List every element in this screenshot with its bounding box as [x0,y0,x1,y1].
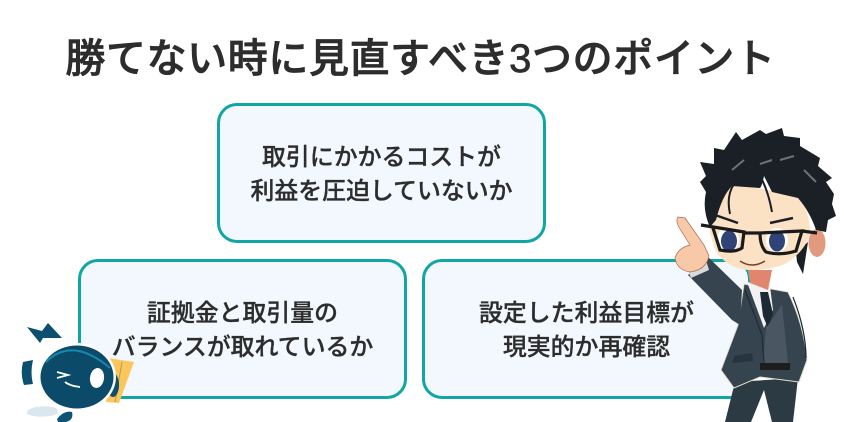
illustration: businessman pointing up [674,128,836,422]
title: 勝てない時に見直すべき3つのポイント [65,37,776,81]
shirt and tie [747,282,773,328]
jacket body [721,284,807,388]
panel: profit target: 設定した利益目標が [479,300,694,326]
panel: margin and volume: バランスが取れているか [112,334,373,360]
vest [763,304,788,363]
glasses [701,225,817,254]
legs [725,378,798,422]
face [708,183,810,270]
panel: profit target [422,259,751,399]
shirt cuff [687,260,709,278]
raised arm [688,257,742,325]
pointing hand [675,217,709,272]
hair [700,128,836,232]
belt [760,363,790,370]
mouth [740,261,765,265]
hair highlights [732,156,816,182]
eyebrows [715,215,793,223]
panel: margin and volume [78,259,407,399]
panel: trading costs [217,103,546,243]
front hair strands [729,176,772,214]
panel: profit target: 現実的か再確認 [503,334,670,360]
sideburn [796,242,808,274]
panel: margin and volume: 証拠金と取引量の [147,300,338,326]
neck [748,270,772,290]
jacket lapel lines [745,290,806,363]
icon: robot mascot [22,323,134,422]
panel: trading costs: 利益を圧迫していないか [250,178,513,204]
eyes [717,228,739,252]
ear [808,229,826,257]
panel: trading costs: 取引にかかるコストが [262,144,501,170]
